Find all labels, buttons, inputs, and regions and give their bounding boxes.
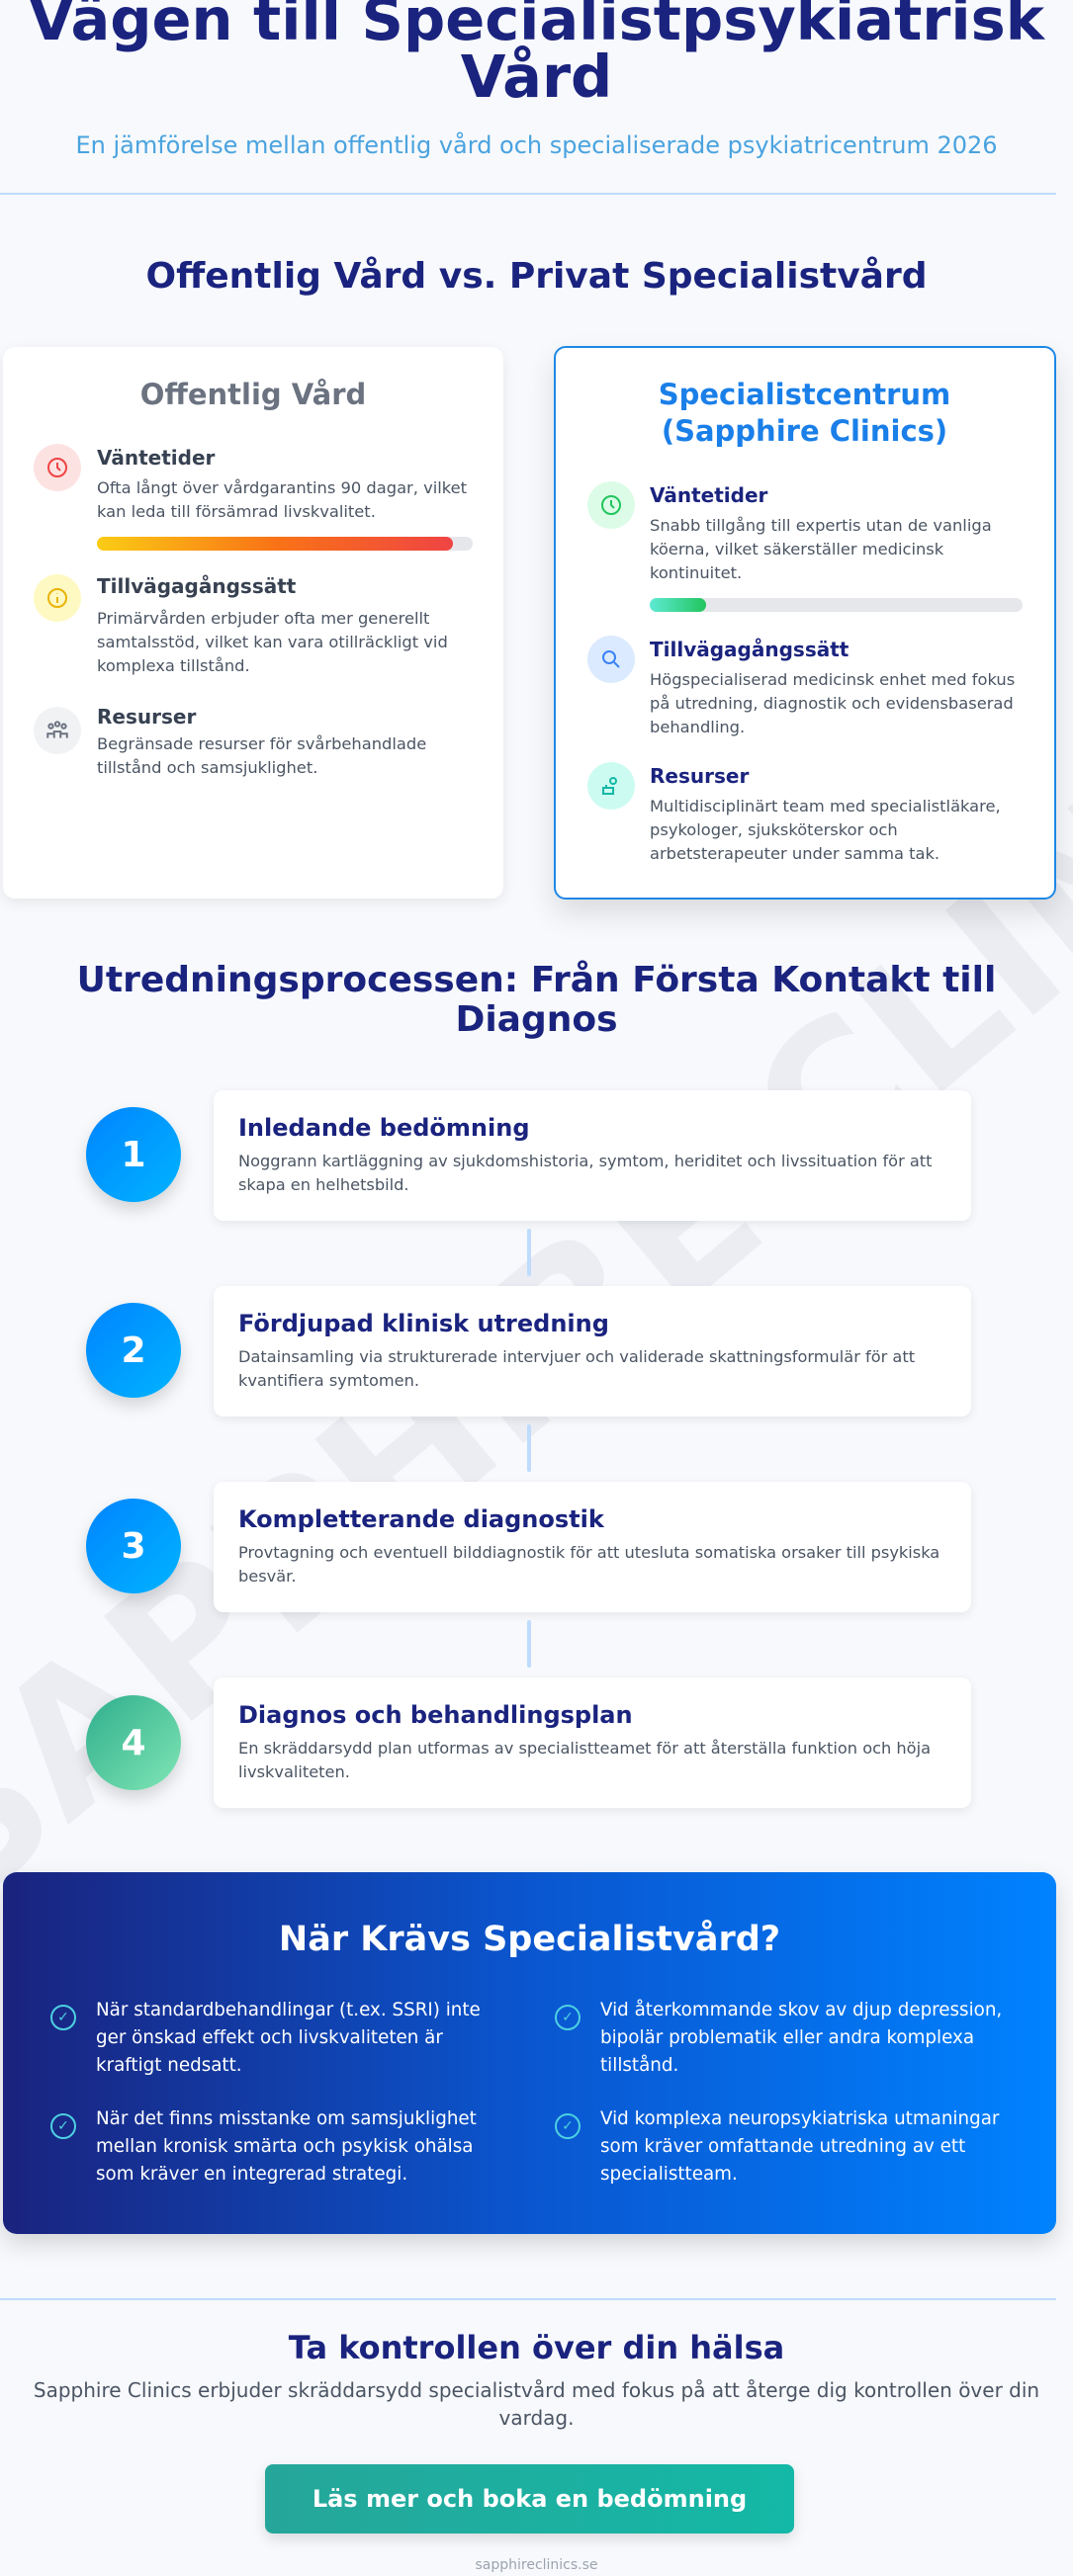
card title: Specialistcentrum [659,378,950,411]
badge 1: 1 [121,1135,146,1174]
bar: short wait [650,598,1023,612]
panel: specialist center: Snabb tillgång till expertis utan de vanliga köerna, vilket säkerställer medicinsk kontinuitet. [650,516,992,582]
heading: cta: Ta kontrollen över din hälsa [289,2329,784,2366]
panel: public care: Ofta långt över vårdgarantins 90 dagar, vilket kan leda till försämrad livskvalitet. [97,478,467,521]
card 2: Datainsamling via strukturerade intervjuer och validerade skattningsformulär för att kvantifiera symtomen. [238,1347,915,1390]
panel: specialist center [554,346,1056,900]
card title [659,378,950,448]
step 2 [81,1286,971,1419]
panel: when specialist care [3,1872,1056,2234]
icon: info yellow [34,574,81,622]
item 1: När standardbehandlingar (t.ex. SSRI) inte ger önskad effekt och livskvaliteten är kraftigt nedsatt. [96,2000,481,2076]
title [29,0,1045,111]
card 1: Inledande bedömning [238,1114,530,1142]
item 2: Vid återkommande skov av djup depression, bipolär problematik eller andra komplexa tillstånd. [600,2000,1002,2076]
card 2 [214,1286,971,1417]
panel: public care: Begränsade resurser för svårbehandlade tillstånd och samsjuklighet. [97,734,426,777]
card 4: En skräddarsydd plan utformas av specialistteamet för att återställa funktion och höja livskvaliteten. [238,1739,931,1781]
icon: clock red [34,444,81,491]
bar: long wait [97,537,473,551]
step 4 [81,1692,971,1811]
badge 3: 3 [121,1526,146,1566]
badge 1 [86,1107,181,1202]
title: Vård [461,43,612,111]
icon: clock green [587,481,635,529]
item: väntetider: Väntetider [97,446,215,470]
panel: public care: Primärvården erbjuder ofta mer generellt samtalsstöd, vilket kan vara otillräckligt vid komplexa tillstånd. [97,609,448,675]
item: resurser: Resurser [650,764,749,788]
icon: search blue [587,636,635,683]
item 4: ✓ [562,2118,574,2134]
button: Läs mer och boka en bedömning [313,2485,747,2513]
card title: (Sapphire Clinics) [662,414,947,448]
badge 2: 2 [121,1331,146,1370]
button [265,2464,794,2533]
badge 4 [86,1695,181,1790]
card 3: Kompletterande diagnostik [238,1505,604,1533]
panel: public care [3,347,503,899]
card 4 [214,1677,971,1808]
card 2: Fördjupad klinisk utredning [238,1310,609,1337]
item 2: ✓ [562,2010,574,2025]
card 3 [214,1482,971,1612]
icon: people gray [34,707,81,754]
badge 3 [86,1499,181,1593]
item: tillvägagångssätt: Tillvägagångssätt [97,574,296,598]
item 3: ✓ [57,2118,69,2134]
card 1: Noggrann kartläggning av sjukdomshistoria, symtom, heriditet och livssituation för att skapa en helhetsbild. [238,1152,932,1194]
panel: specialist center: Multidisciplinärt team med specialistläkare, psykologer, sjuksköterskor och arbetsterapeuter under samma tak. [650,797,1001,863]
heading: process: Utredningsprocessen: Från Första Kontakt till Diagnos [77,960,996,1040]
item 4: Vid komplexa neuropsykiatriska utmaningar som kräver omfattande utredning av ett specialistteam. [600,2108,999,2185]
card title: Offentlig Vård [140,378,366,411]
badge 2 [86,1303,181,1398]
panel: specialist center: Högspecialiserad medicinsk enhet med fokus på utredning, diagnostik och evidensbaserad behandling. [650,670,1015,736]
item: väntetider: Väntetider [650,483,767,507]
panel heading: När Krävs Specialistvård? [279,1920,780,1959]
footer: sapphireclinics.se [475,2557,598,2573]
step 1 [81,1090,971,1224]
cta text: Sapphire Clinics erbjuder skräddarsydd specialistvård med fokus på att återge dig kontrollen över din vardag. [34,2378,1039,2430]
item: tillvägagångssätt: Tillvägagångssätt [650,638,849,661]
item 3: När det finns misstanke om samsjuklighet mellan kronisk smärta och psykisk ohälsa som kräver en integrerad strategi. [96,2108,477,2185]
item: resurser: Resurser [97,705,196,729]
item 1: ✓ [57,2010,69,2025]
badge 4: 4 [121,1722,146,1763]
heading: comparison: Offentlig Vård vs. Privat Specialistvård [145,256,928,297]
icon: team teal [587,762,635,810]
card 3: Provtagning och eventuell bilddiagnostik för att utesluta somatiska orsaker till psykiska besvär. [238,1543,939,1586]
card 4: Diagnos och behandlingsplan [238,1701,633,1729]
subtitle: En jämförelse mellan offentlig vård och specialiserade psykiatricentrum 2026 [75,131,998,159]
step 3 [81,1482,971,1615]
card 1 [214,1090,971,1221]
